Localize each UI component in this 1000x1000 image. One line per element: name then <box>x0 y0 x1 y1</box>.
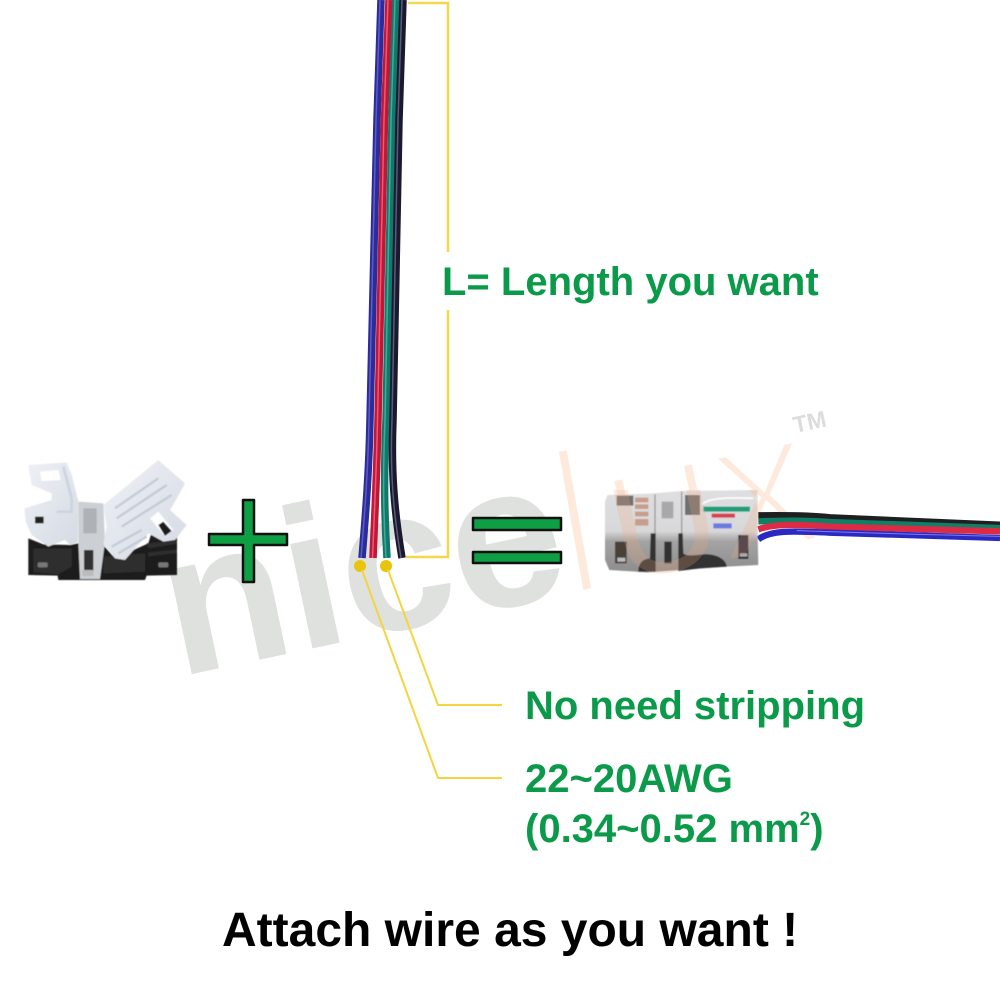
label: wire gauge <box>525 757 824 851</box>
label: wire gauge: 2 <box>800 809 810 830</box>
connector clear right flap <box>103 460 187 560</box>
length bracket <box>406 3 448 557</box>
connector body <box>605 490 758 572</box>
connector wire colours <box>703 507 750 512</box>
label: length: L= Length you want <box>442 260 819 304</box>
leader: no need stripping <box>388 570 502 705</box>
wire: blue <box>361 0 381 558</box>
wire: green <box>384 0 396 558</box>
label: no stripping: No need stripping <box>525 684 865 728</box>
connector contacts <box>635 498 648 526</box>
watermark tint over connector: UX <box>593 406 831 613</box>
connector black base <box>28 522 177 580</box>
wire: red <box>372 0 389 558</box>
icon: equals sign <box>473 518 561 563</box>
icon: plus sign <box>209 500 287 582</box>
connector center strap <box>78 502 105 579</box>
callout dots <box>354 560 392 572</box>
connector clear left flap <box>24 462 78 547</box>
watermark: nice: nice <box>140 414 582 719</box>
wire: black <box>391 0 403 558</box>
leader: wire gauge <box>362 570 502 778</box>
label: wire gauge: (0.34~0.52 mm <box>525 807 800 851</box>
icon: open clip connector <box>24 460 187 580</box>
icon: closed connector <box>605 490 758 572</box>
wires: four-colour cable <box>361 0 403 558</box>
label: wire gauge: ) <box>810 807 824 851</box>
watermark: UX: UX <box>593 406 831 613</box>
icon: output cable <box>758 515 1000 539</box>
label: wire gauge: 22~20AWG <box>525 757 733 801</box>
watermark: trademark: TM <box>791 406 829 438</box>
connector latches <box>638 533 656 572</box>
footer title: Attach wire as you want ! <box>222 904 798 957</box>
